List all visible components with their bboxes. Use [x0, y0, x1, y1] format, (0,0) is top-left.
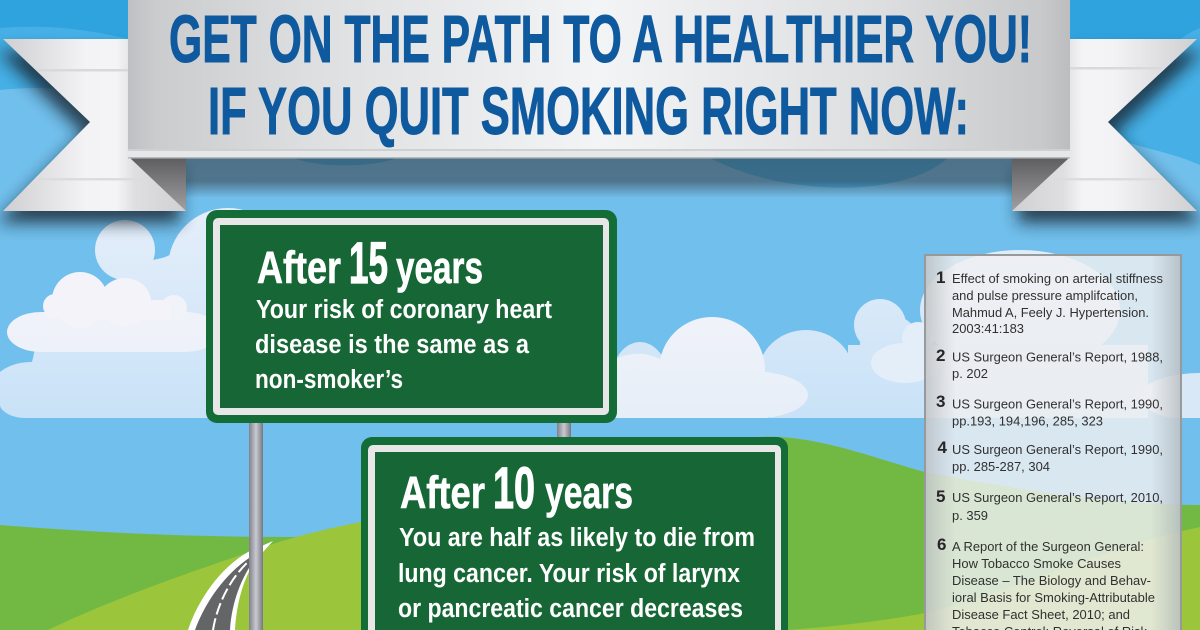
reference 4 [938, 438, 1163, 474]
hills [0, 437, 1200, 630]
reference 2: 2 [936, 346, 945, 365]
reference 1: Effect of smoking on arterial stiffness [952, 272, 1163, 286]
reference 6: A Report of the Surgeon General: [952, 540, 1144, 554]
reference 6: Disease Fact Sheet, 2010; and [952, 608, 1130, 622]
reference 5: p. 359 [952, 509, 988, 523]
sign 2 body text: You are half as likely to die from [399, 524, 755, 552]
reference 4: US Surgeon General’s Report, 1990, [952, 443, 1163, 457]
reference 6 [937, 535, 1155, 630]
reference 3: pp.193, 194,196, 285, 323 [952, 414, 1103, 428]
sign 1 body text: disease is the same as a [255, 331, 530, 359]
sign 2 body text: or pancreatic cancer decreases [398, 595, 743, 623]
sign 1 body text [255, 296, 552, 394]
reference 3 [936, 392, 1163, 428]
reference 6: Disease – The Biology and Behav- [952, 574, 1151, 588]
sign 1 body text: non-smoker’s [255, 366, 403, 394]
reference 4: pp. 285-287, 304 [952, 460, 1050, 474]
sign 1 heading: years [396, 242, 483, 293]
sign 1 heading: 15 [349, 231, 388, 296]
left ribbon tail [0, 39, 186, 223]
reference 3: 3 [936, 392, 945, 411]
sign 1 heading [257, 231, 483, 296]
clouds right [610, 250, 1200, 428]
road [188, 541, 273, 630]
reference 4: 4 [938, 438, 948, 457]
reference 6: How Tobacco Smoke Causes [952, 557, 1121, 571]
reference 1: Mahmud A, Feely J. Hypertension. [952, 306, 1149, 320]
reference 6: ioral Basis for Smoking-Attributable [952, 591, 1155, 605]
right ribbon tail [1012, 39, 1200, 223]
sign 2 body text: lung cancer. Your risk of larynx [398, 560, 740, 588]
sign 2 heading: After [400, 467, 485, 518]
sign: after 10 years [361, 437, 788, 630]
references panel [925, 255, 1181, 630]
reference 5: US Surgeon General’s Report, 2010, [952, 491, 1163, 505]
reference 1: and pulse pressure amplifcation, [952, 289, 1138, 303]
banner [128, 0, 1070, 158]
sign 2 body text [398, 524, 755, 623]
reference 6: 6 [937, 535, 946, 554]
reference 3: US Surgeon General’s Report, 1990, [952, 398, 1163, 412]
reference 5 [936, 487, 1163, 523]
sign 1 body text: Your risk of coronary heart [256, 296, 552, 324]
sign 1 heading: After [257, 242, 341, 293]
banner shadow [128, 158, 1070, 198]
clouds left [0, 208, 243, 418]
reference 1: 1 [936, 268, 945, 287]
sign 2 heading [400, 456, 633, 521]
reference 1 [936, 268, 1163, 336]
reference 1: 2003:41:183 [952, 322, 1024, 336]
reference 5: 5 [936, 487, 945, 506]
sign: after 15 years [206, 210, 617, 423]
sign 2 heading: 10 [493, 456, 535, 521]
sign posts [249, 423, 571, 630]
reference 2 [936, 346, 1163, 381]
reference 2: US Surgeon General’s Report, 1988, [952, 350, 1163, 364]
sign 2 heading: years [545, 467, 633, 518]
reference 2: p. 202 [952, 367, 988, 381]
